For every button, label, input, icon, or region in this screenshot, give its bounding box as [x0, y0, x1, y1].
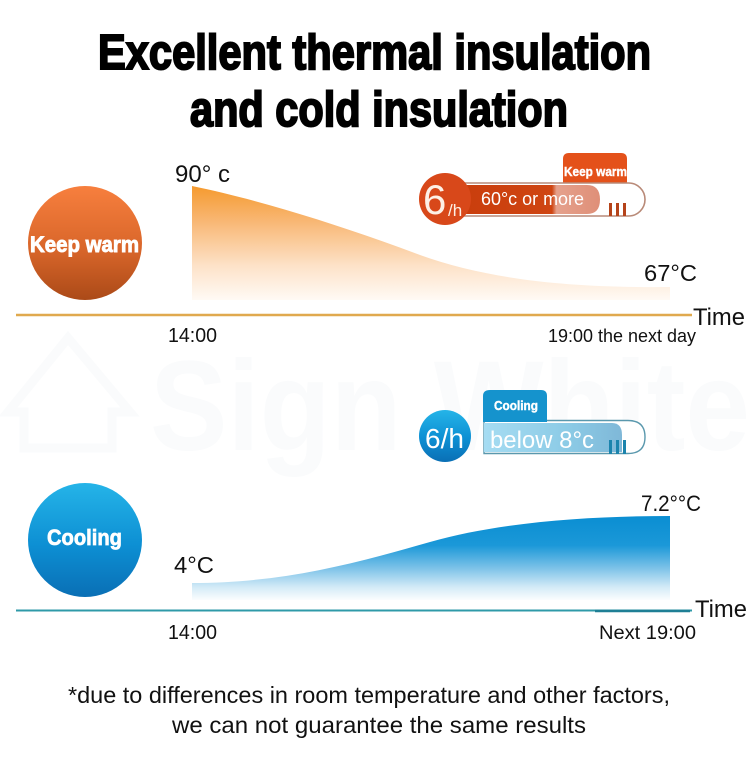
cool start time: 14:00	[168, 622, 217, 644]
warm time axis: Time	[693, 304, 745, 331]
warm end time: 19:00 the next day	[548, 326, 696, 346]
title: and cold insulation	[190, 83, 568, 137]
footnote: we can not guarantee the same results	[171, 712, 586, 738]
warm duration badge: /h	[448, 201, 462, 220]
label 67 C: 67°C	[644, 260, 697, 286]
keep warm circle	[28, 186, 142, 300]
cool duration badge: 6/h	[425, 423, 464, 454]
cool temperature curve	[192, 516, 670, 600]
label 90 c: 90° c	[175, 161, 230, 188]
cooling circle	[28, 483, 142, 597]
warm duration badge	[419, 153, 645, 225]
warm duration badge: 6	[423, 176, 446, 223]
title	[98, 26, 651, 137]
warm duration badge: 60°c or more	[481, 189, 584, 209]
title: Excellent thermal insulation	[98, 26, 651, 80]
cool duration badge: below 8°c	[490, 427, 594, 454]
cooling tab: Cooling	[494, 398, 538, 413]
keep warm tab	[563, 153, 627, 183]
warm temperature curve	[192, 186, 670, 300]
cool end time: Next 19:00	[599, 623, 696, 644]
footnote: *due to differences in room temperature and other factors,	[68, 682, 670, 708]
footnote	[68, 682, 670, 738]
cool duration badge	[419, 390, 645, 462]
cool time axis: Time	[695, 596, 747, 623]
warm start time: 14:00	[168, 325, 217, 347]
label 4 C: 4°C	[174, 552, 214, 578]
capsule	[484, 420, 645, 454]
keep warm circle: Keep warm	[30, 232, 139, 257]
keep warm tab: Keep warm	[564, 164, 627, 179]
bar capsule	[440, 183, 645, 216]
six per hour circle	[419, 173, 471, 225]
cooling circle: Cooling	[47, 525, 122, 550]
six per hour circle	[419, 410, 471, 462]
label 7.2 C: 7.2°°C	[641, 491, 701, 516]
cooling tab	[483, 390, 547, 422]
